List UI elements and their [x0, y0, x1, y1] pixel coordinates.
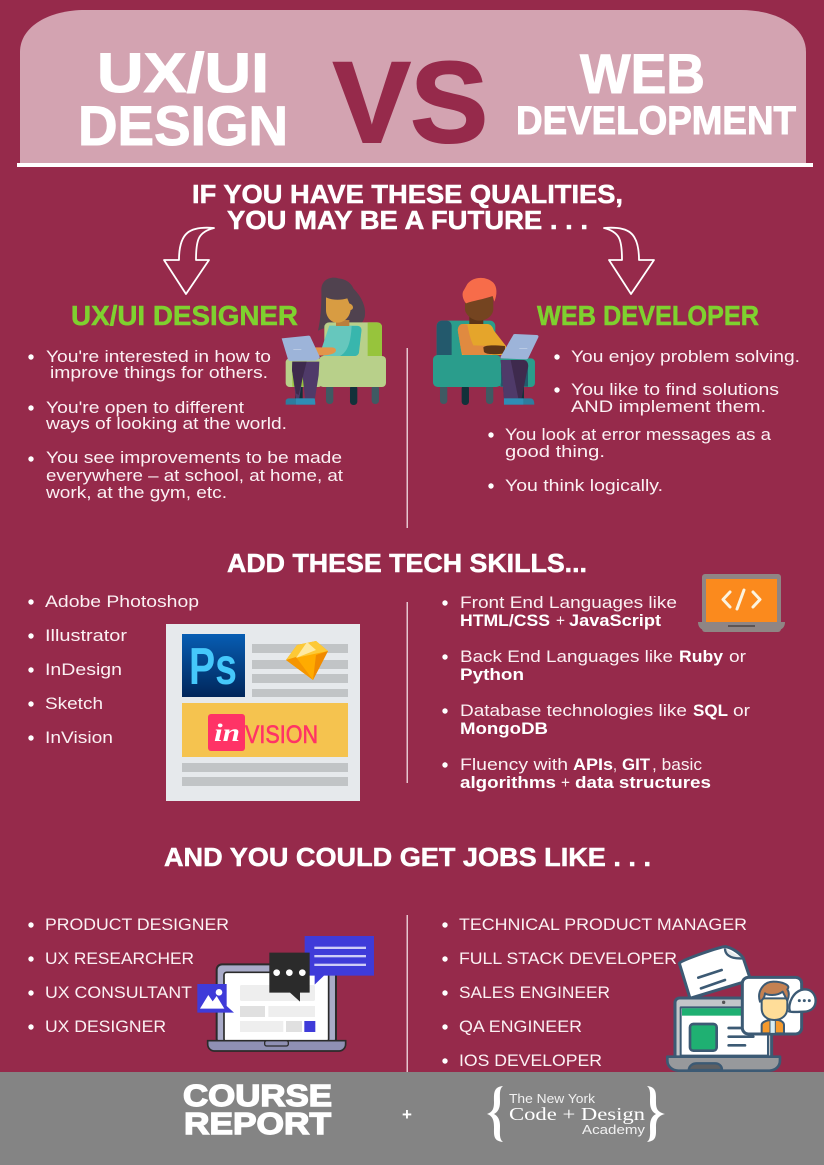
list: developer tech skills: , basic [652, 756, 702, 774]
list: developer tech skills: + [556, 612, 565, 630]
list: design tools: InVision [45, 729, 113, 747]
icon: designer in armchair [282, 278, 386, 405]
title: Web Development: WEB [580, 42, 705, 105]
arrow: left curved down [164, 228, 214, 294]
list: developer qualities: AND implement them. [571, 398, 766, 416]
icon: developer in armchair [433, 278, 539, 405]
list: designer qualities: ways of looking at the world. [45, 415, 287, 433]
heading: qualities: YOU MAY BE A FUTURE . . . [227, 205, 588, 235]
logo: The New York Code + Design Academy: Academy [582, 1122, 646, 1137]
list: developer tech skills: , [613, 756, 617, 774]
plus sign: + [402, 1105, 412, 1124]
list: developer tech skills: Back End Languages like [460, 648, 673, 666]
list: design tools: Adobe Photoshop [45, 593, 199, 611]
list: developer tech skills: + [561, 774, 570, 792]
title: UX/UI Design: DESIGN [78, 94, 288, 157]
list: design tools [28, 593, 199, 747]
list: developer jobs [442, 916, 747, 1070]
list: developer tech skills: SQL [693, 702, 728, 720]
logo: Course Report [183, 1078, 332, 1141]
footer bar [0, 1072, 824, 1165]
list: designer qualities: everywhere – at school, at home, at [46, 467, 343, 485]
list: designer jobs: UX CONSULTANT [45, 984, 192, 1002]
heading: qualities: IF YOU HAVE THESE QUALITIES, [192, 179, 623, 209]
list: designer qualities: work, at the gym, etc. [45, 484, 227, 502]
logo: The New York Code + Design Academy: The New York [509, 1092, 596, 1106]
list: developer tech skills [442, 594, 751, 792]
list: designer jobs: PRODUCT DESIGNER [45, 916, 229, 934]
list: designer qualities: You see improvements to be made [46, 449, 342, 467]
icon: design laptop with chat bubbles [197, 936, 374, 1051]
list: developer tech skills: GIT [622, 756, 650, 774]
list: developer qualities: You look at error messages as a [505, 426, 772, 444]
list: developer tech skills: Python [460, 666, 524, 684]
icon: developer laptop with profile card [667, 947, 816, 1071]
list: design tools: Illustrator [45, 627, 128, 645]
list: developer jobs: QA ENGINEER [459, 1018, 582, 1036]
list: developer jobs: SALES ENGINEER [459, 984, 610, 1002]
icon: InVision logo: VISION [245, 721, 318, 749]
list: developer qualities [488, 348, 800, 495]
list: developer tech skills: or [729, 648, 747, 666]
icon: Photoshop logo: Ps [189, 638, 237, 696]
header banner [17, 10, 813, 167]
title: Web Development [516, 42, 796, 143]
heading: jobs: AND YOU COULD GET JOBS LIKE . . . [164, 842, 651, 872]
list: designer qualities [28, 348, 343, 502]
icon: code laptop [698, 574, 785, 632]
heading: Web Developer: WEB DEVELOPER [537, 300, 759, 331]
list: developer tech skills: Database technologies like [460, 702, 687, 720]
list: developer tech skills: Fluency with [460, 756, 568, 774]
title: VS: VS [333, 39, 488, 167]
title: UX/UI Design [78, 41, 288, 157]
list: developer qualities: You think logically. [505, 477, 663, 495]
icon: InVision logo: in [214, 720, 240, 747]
list: developer tech skills: HTML/CSS [460, 612, 550, 630]
list: developer jobs: TECHNICAL PRODUCT MANAGER [459, 916, 747, 934]
logo: Course Report: REPORT [184, 1106, 331, 1141]
list: developer tech skills: JavaScript [569, 612, 662, 630]
list: designer jobs: UX DESIGNER [45, 1018, 166, 1036]
list: design tools: InDesign [45, 661, 122, 679]
logo: The New York Code + Design Academy: Code + Design [509, 1104, 645, 1124]
arrow: right curved down [604, 228, 654, 294]
list: developer tech skills: Front End Languages like [460, 594, 677, 612]
list: developer qualities: You like to find solutions [571, 381, 779, 399]
list: designer qualities: You're interested in how to [46, 348, 271, 366]
panel: UX/UI designer qualities [28, 278, 386, 502]
list: developer qualities: good thing. [505, 443, 605, 461]
panel: design tool logos [166, 624, 360, 801]
list: developer jobs: FULL STACK DEVELOPER [459, 950, 677, 968]
list: developer tech skills: or [733, 702, 751, 720]
list: designer qualities: improve things for others. [50, 364, 268, 382]
panel: web developer qualities [433, 278, 800, 495]
list: developer tech skills: APIs [573, 756, 613, 774]
heading: UX/UI Designer: UX/UI DESIGNER [71, 300, 298, 331]
list: designer jobs [28, 916, 229, 1036]
list: developer jobs: IOS DEVELOPER [459, 1052, 602, 1070]
title: UX/UI Design: UX/UI [97, 41, 269, 104]
icon: Sketch diamond [286, 641, 328, 680]
list: developer tech skills: MongoDB [460, 720, 548, 738]
icon: InVision logo [182, 703, 348, 757]
list: designer qualities: You're open to different [46, 399, 244, 417]
list: developer qualities: You enjoy problem solving. [571, 348, 800, 366]
list: design tools: Sketch [45, 695, 103, 713]
list: developer tech skills: algorithms [460, 774, 556, 792]
logo: The New York Code + Design Academy [487, 1086, 665, 1142]
list: designer jobs: UX RESEARCHER [45, 950, 194, 968]
title: Web Development: DEVELOPMENT [516, 99, 796, 143]
list: developer tech skills: data structures [575, 774, 711, 792]
heading: qualities [192, 179, 623, 235]
heading: tech skills: ADD THESE TECH SKILLS... [227, 548, 587, 578]
logo: Course Report: COURSE [183, 1078, 332, 1113]
list: developer tech skills: Ruby [679, 648, 724, 666]
